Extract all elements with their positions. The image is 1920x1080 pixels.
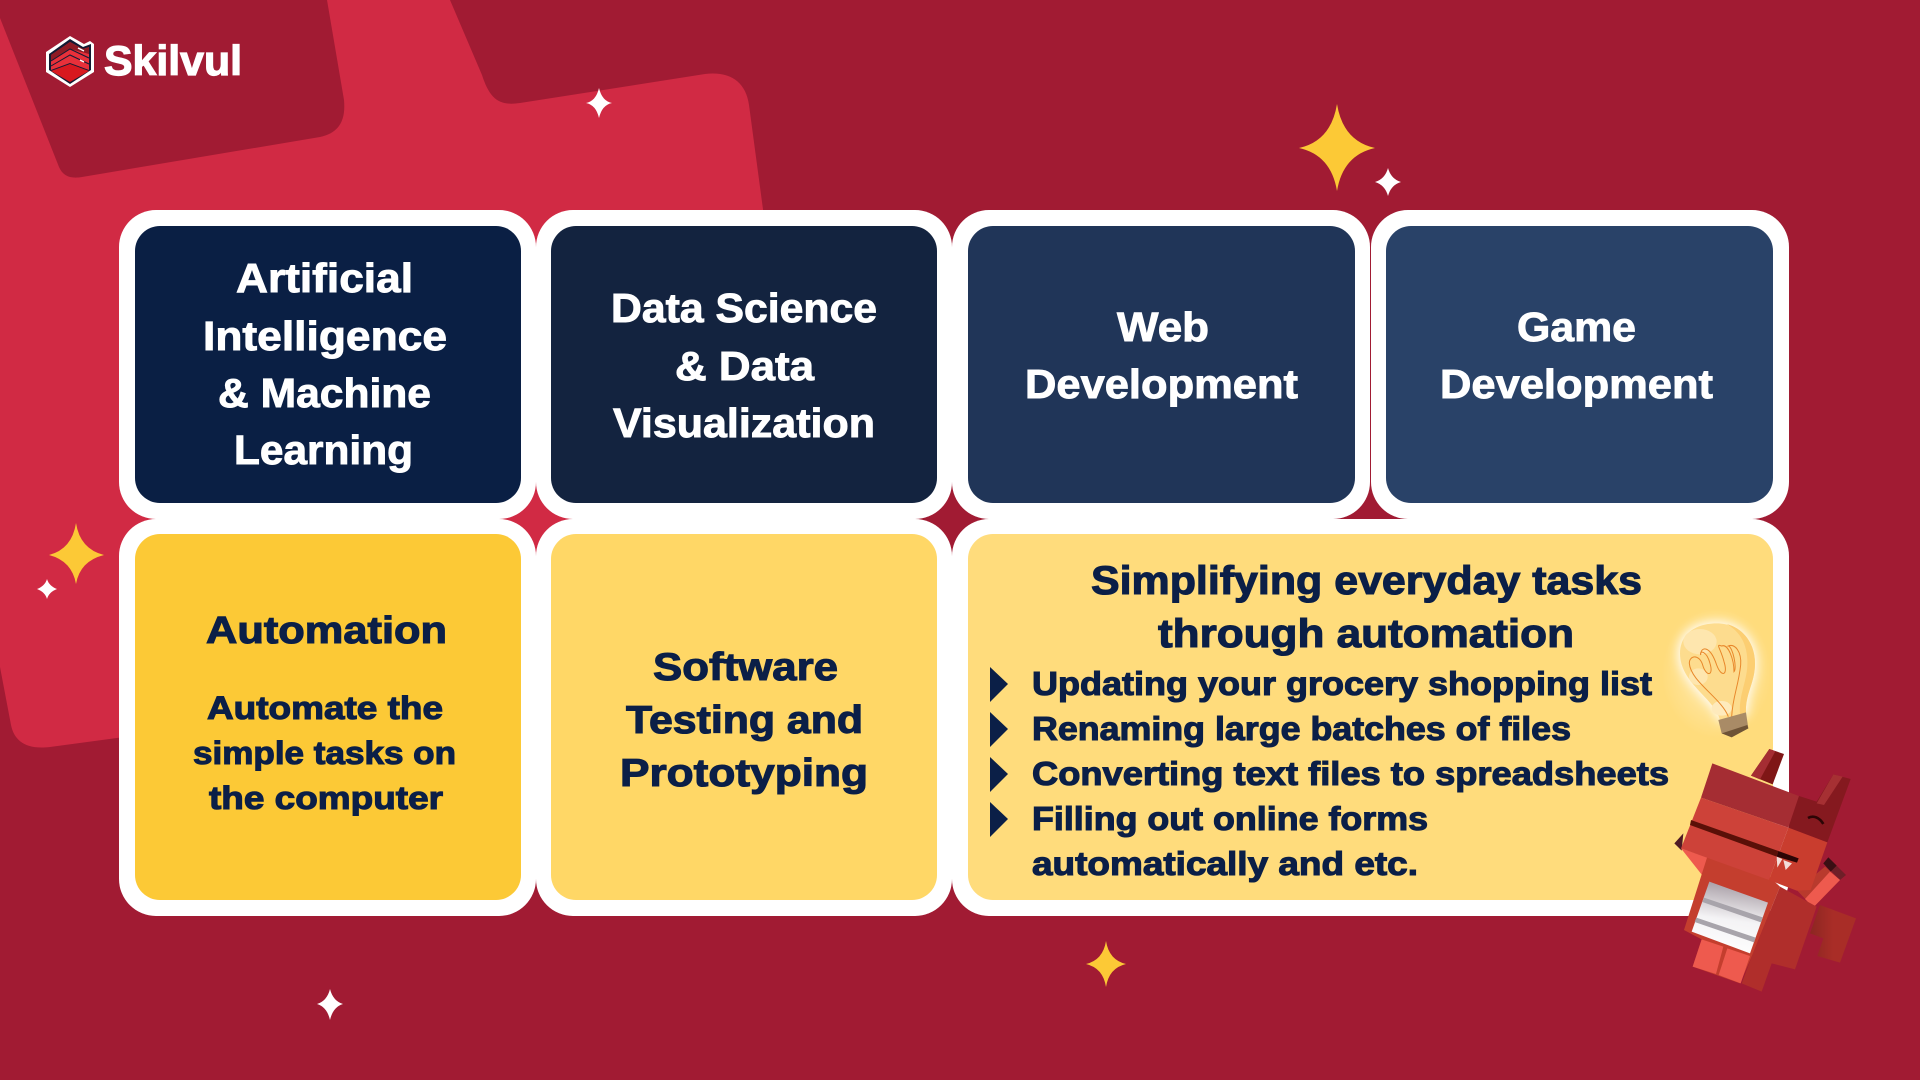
- heading: AI and machine learning: Intelligence: [203, 313, 447, 359]
- heading: game development: Development: [1440, 361, 1713, 407]
- panel: Web Development: [952, 210, 1370, 519]
- panel: Simplifying everyday tasks: [952, 519, 1789, 916]
- icon: light bulb: [1662, 608, 1772, 738]
- dragon belly: [1692, 882, 1768, 953]
- background shape: dark block behind logo: [0, 0, 344, 178]
- text: automation description: Automate the: [207, 690, 443, 726]
- dragon body: [1684, 857, 1780, 983]
- dragon right arm: [1797, 857, 1846, 907]
- list text: Converting text files to spreadsheets: [1032, 755, 1669, 792]
- panel: Software Testing: [536, 519, 952, 916]
- bullet arrow 1: [990, 667, 1008, 702]
- heading: data science and data visualization: [611, 285, 877, 446]
- panel: Game Development: [1371, 210, 1789, 519]
- list text: [1032, 665, 1669, 882]
- heading: simplifying everyday tasks: through automation: [1158, 612, 1574, 656]
- dragon side: [1742, 887, 1817, 992]
- bullet arrow 2: [990, 712, 1008, 747]
- heading: AI and machine learning: Artificial: [236, 255, 413, 301]
- text: automation description: simple tasks on: [193, 735, 456, 771]
- heading: game development: [1440, 304, 1713, 407]
- dragon tail: [1810, 905, 1856, 963]
- list text: automatically and etc.: [1032, 845, 1418, 882]
- text: automation description: [193, 690, 456, 816]
- heading: game development: Game: [1517, 304, 1636, 350]
- list text: Updating your grocery shopping list: [1032, 665, 1652, 702]
- heading: AI and machine learning: & Machine: [218, 370, 431, 416]
- dragon back horn: [1751, 749, 1784, 784]
- panel: Automation: [119, 519, 536, 916]
- heading: simplifying everyday tasks: [1091, 559, 1642, 656]
- dragon head: [1681, 763, 1851, 891]
- panel: Artificial Intelligence: [119, 210, 536, 519]
- icon: red dragon mascot: [1674, 749, 1856, 992]
- heading: AI and machine learning: Learning: [234, 427, 413, 473]
- logo wordmark: Skilvul: [104, 37, 242, 84]
- sparkle: yellow bottom: [1086, 941, 1126, 987]
- bullet list: [990, 665, 1669, 882]
- heading: data science and data visualization: & Data: [675, 343, 815, 389]
- sparkle: yellow left: [49, 523, 104, 584]
- heading: software testing and prototyping: [620, 646, 868, 795]
- heading: AI and machine learning: [203, 255, 447, 473]
- panel: Data Science: [536, 210, 952, 519]
- heading: web development: Development: [1025, 361, 1298, 407]
- heading: software testing and prototyping: Testing and: [626, 699, 863, 742]
- dragon left arm: [1674, 833, 1710, 877]
- heading: data science and data visualization: Visualization: [613, 400, 875, 446]
- sparkle: yellow top right: [1299, 104, 1375, 191]
- text: automation description: the computer: [209, 780, 443, 816]
- heading: web development: [1025, 304, 1298, 407]
- heading: data science and data visualization: Data Science: [611, 285, 877, 331]
- sparkle: white bottom: [317, 989, 343, 1020]
- sparkle: white top right: [1375, 168, 1401, 196]
- bullet arrow 3: [990, 757, 1008, 792]
- heading: simplifying everyday tasks: Simplifying everyday tasks: [1091, 559, 1642, 603]
- logo: [46, 36, 242, 87]
- dragon legs: [1693, 939, 1750, 983]
- background shape: red block: [0, 0, 802, 748]
- bullet arrow 4: [990, 802, 1008, 837]
- heading: software testing and prototyping: Prototyping: [620, 752, 868, 795]
- heading: software testing and prototyping: Software: [653, 646, 838, 689]
- list text: Filling out online forms: [1032, 800, 1428, 837]
- sparkle: white left: [37, 579, 57, 599]
- heading: web development: Web: [1117, 304, 1209, 350]
- heading: automation: Automation: [206, 610, 447, 652]
- logo icon: [46, 36, 94, 87]
- sparkle: white top: [586, 88, 612, 118]
- list text: Renaming large batches of files: [1032, 710, 1571, 747]
